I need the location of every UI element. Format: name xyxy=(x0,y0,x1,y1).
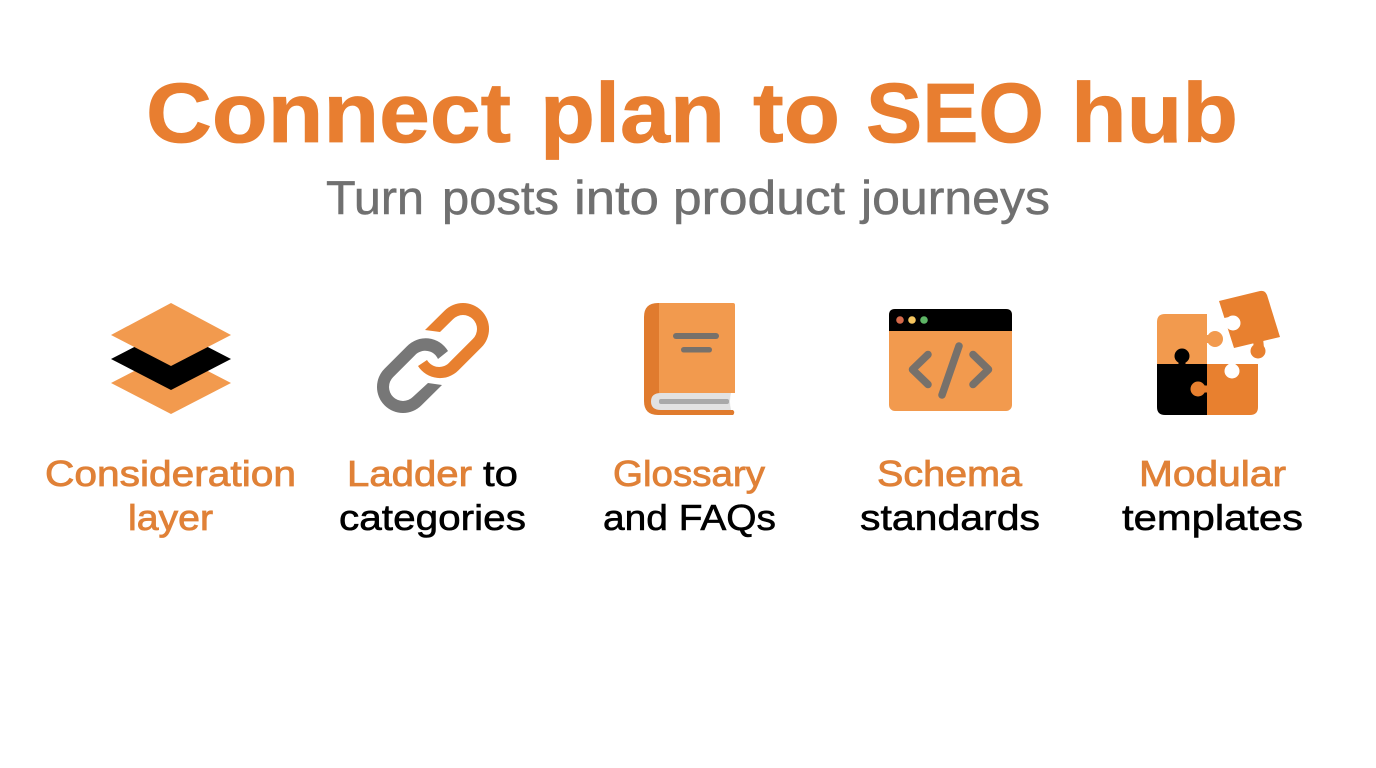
subtitle: posts xyxy=(442,171,559,224)
label: ladder to categories xyxy=(339,453,526,538)
item: consideration layer xyxy=(45,303,296,538)
subtitle: product xyxy=(673,171,845,224)
title: hub xyxy=(1071,66,1238,160)
subtitle: Turn xyxy=(326,171,424,224)
label: glossary and FAQs: and FAQs xyxy=(603,497,776,538)
title: to xyxy=(753,66,840,160)
title: SEO xyxy=(866,66,1044,160)
label: consideration layer xyxy=(45,453,296,538)
label: ladder to categories: categories xyxy=(339,497,526,538)
title: plan xyxy=(540,66,725,160)
label: glossary and FAQs xyxy=(603,453,776,538)
label: modular templates xyxy=(1122,453,1303,538)
label: consideration layer: layer xyxy=(128,497,213,538)
icon: chain link xyxy=(377,303,489,413)
label: schema standards: standards xyxy=(860,497,1040,538)
item: schema standards xyxy=(860,309,1040,538)
label: consideration layer: Consideration xyxy=(45,453,296,494)
subtitle: journeys xyxy=(859,171,1050,224)
subtitle xyxy=(326,171,1050,224)
subtitle: into xyxy=(574,171,659,224)
icon: book xyxy=(644,303,735,415)
label: modular templates: Modular xyxy=(1139,453,1286,494)
title: Connect xyxy=(146,66,511,160)
label: glossary and FAQs: Glossary xyxy=(613,453,765,494)
label: modular templates: templates xyxy=(1122,497,1303,538)
item: glossary and FAQs xyxy=(603,303,776,538)
label: ladder to categories: Ladder xyxy=(347,453,472,494)
icon: puzzle pieces xyxy=(1157,291,1280,415)
title xyxy=(146,66,1238,160)
label: ladder to categories: to xyxy=(483,453,518,494)
icon: code window xyxy=(889,309,1012,411)
icon: stacked layers xyxy=(111,303,231,414)
label: schema standards xyxy=(860,453,1040,538)
item: ladder to categories xyxy=(339,303,526,538)
label: schema standards: Schema xyxy=(877,453,1023,494)
item: modular templates xyxy=(1122,291,1303,538)
